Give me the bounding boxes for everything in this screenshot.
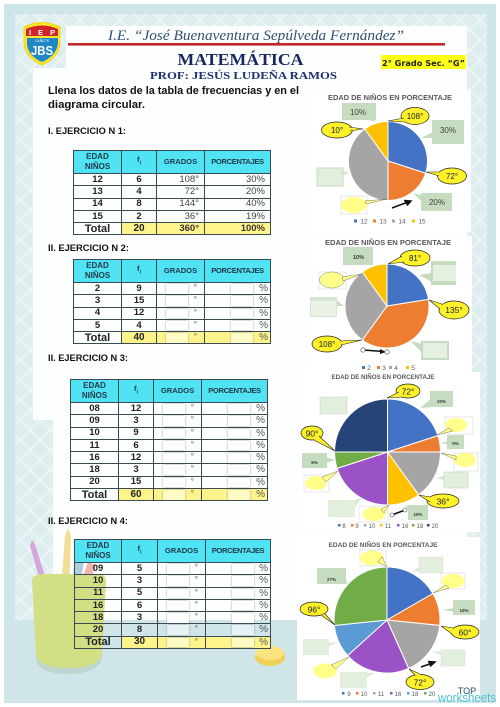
table 2: Total bbox=[85, 332, 110, 344]
table 2: % bbox=[259, 308, 268, 319]
table 3: 09 bbox=[89, 415, 100, 426]
table 2: ° bbox=[194, 308, 197, 317]
table 3: 20 bbox=[89, 476, 100, 487]
label 10% bbox=[343, 247, 373, 265]
label 5% bbox=[302, 453, 335, 468]
label 10% bbox=[442, 600, 475, 615]
legend: 12 bbox=[360, 218, 368, 226]
blank label bbox=[436, 472, 468, 488]
table 3: Total bbox=[82, 489, 107, 501]
callout 81° bbox=[388, 250, 430, 266]
table 3: 6 bbox=[133, 440, 139, 451]
label 10%: 10% bbox=[353, 255, 364, 261]
table 1: 360° bbox=[179, 223, 199, 234]
label 27%: 27% bbox=[327, 577, 336, 582]
table 3: GRADOS bbox=[161, 386, 194, 395]
legend: 5 bbox=[411, 365, 415, 372]
table 2: 4 bbox=[136, 320, 142, 331]
callout 81°: 81° bbox=[409, 254, 421, 263]
callout 108°: 108° bbox=[407, 112, 423, 121]
blank label bbox=[432, 650, 465, 666]
table 4: NIÑOS bbox=[85, 551, 111, 560]
label 10%: 10% bbox=[413, 512, 423, 517]
callout 96° bbox=[300, 602, 335, 625]
table 4: 6 bbox=[137, 600, 142, 611]
table 1: 4 bbox=[136, 186, 142, 197]
callout 108° bbox=[388, 108, 429, 124]
callout 72°: 72° bbox=[414, 678, 426, 688]
table 2: fi bbox=[137, 264, 141, 276]
label 20%: 20% bbox=[429, 198, 445, 207]
table 3: ° bbox=[191, 415, 194, 424]
table 3: % bbox=[256, 452, 265, 463]
table 1: Total bbox=[85, 223, 110, 235]
table 1: 19% bbox=[246, 211, 265, 222]
callout 72°: 72° bbox=[446, 172, 458, 181]
blank callout bbox=[359, 505, 389, 522]
table 3: 12 bbox=[131, 403, 141, 414]
table 3: NIÑOS bbox=[82, 391, 107, 400]
legend: 13 bbox=[379, 218, 387, 226]
callout 90°: 90° bbox=[306, 428, 318, 438]
table 1: fi bbox=[137, 155, 141, 166]
table 4: 5 bbox=[137, 563, 142, 574]
exercise headings: II. EJERCICIO N 2: bbox=[48, 243, 129, 253]
chart 3: EDAD DE NIÑOS EN PORCENTAJE bbox=[332, 374, 434, 381]
label 10%: 10% bbox=[350, 108, 366, 117]
table 4: 18 bbox=[93, 612, 103, 623]
label 20% bbox=[413, 193, 452, 211]
blank callout bbox=[313, 657, 349, 679]
table 3: 15 bbox=[131, 476, 141, 487]
table 3: 08 bbox=[89, 403, 100, 414]
table 2: 3 bbox=[95, 295, 100, 306]
legend: 3 bbox=[382, 365, 386, 372]
table 3: % bbox=[256, 440, 265, 451]
table 1: 20 bbox=[133, 223, 145, 234]
table 2: ° bbox=[194, 295, 197, 304]
callout 10° bbox=[322, 122, 363, 138]
watermark: TOP bbox=[458, 686, 476, 696]
chart 4 bbox=[297, 537, 480, 700]
callout 72° bbox=[406, 669, 434, 690]
table 2: % bbox=[259, 295, 268, 306]
table 4: ° bbox=[195, 588, 198, 597]
table 3: ° bbox=[191, 489, 194, 498]
table 3: % bbox=[256, 403, 265, 414]
table 4: 3 bbox=[137, 612, 142, 623]
table 4: % bbox=[259, 588, 268, 599]
table 1: 20% bbox=[246, 186, 265, 197]
table 4: 09 bbox=[93, 563, 103, 574]
table 2: % bbox=[259, 332, 268, 343]
blank callout bbox=[441, 453, 478, 471]
legend bbox=[354, 218, 426, 226]
table 4: % bbox=[259, 637, 268, 648]
red rule bbox=[68, 43, 445, 46]
arrow bbox=[361, 348, 389, 354]
table 3: 12 bbox=[131, 452, 141, 463]
legend: 18 bbox=[417, 524, 424, 530]
table 2: ° bbox=[194, 332, 197, 341]
table 1: 6 bbox=[136, 174, 142, 185]
legend: 20 bbox=[432, 524, 439, 530]
blank label bbox=[413, 557, 443, 573]
logo shield: CAÑETE bbox=[35, 38, 50, 43]
table 1: 108° bbox=[179, 174, 199, 185]
table 1: 36° bbox=[185, 211, 199, 222]
table 4: % bbox=[259, 612, 268, 623]
table 3: ° bbox=[191, 452, 194, 461]
table 2 bbox=[73, 259, 271, 344]
label 10% bbox=[342, 103, 376, 122]
table 1: 100% bbox=[241, 223, 265, 234]
watermark: worksheets bbox=[437, 691, 496, 705]
table 4: ° bbox=[195, 563, 198, 572]
watermark bbox=[437, 686, 496, 705]
table 1: 72° bbox=[185, 186, 199, 197]
table 4: 3 bbox=[137, 575, 142, 586]
blank label left bbox=[310, 297, 344, 317]
blank label bbox=[320, 397, 347, 414]
table 1: 15 bbox=[92, 211, 103, 222]
table 3: PORCENTAJES bbox=[208, 386, 261, 395]
table 3: 3 bbox=[133, 415, 139, 426]
legend bbox=[338, 524, 439, 530]
main title: MATEMÁTICA bbox=[178, 50, 304, 69]
table 4: ° bbox=[195, 575, 198, 584]
exercise headings: II. EJERCICIO N 3: bbox=[48, 353, 128, 363]
table 3: ° bbox=[191, 403, 194, 412]
table 4: 30 bbox=[134, 636, 145, 647]
arrow bbox=[390, 508, 407, 517]
label 30% bbox=[421, 120, 464, 144]
table 3: ° bbox=[191, 440, 194, 449]
legend: 14 bbox=[398, 218, 406, 226]
table 4: ° bbox=[195, 612, 198, 621]
legend: 9 bbox=[355, 524, 359, 530]
exercise headings: II. EJERCICIO N 4: bbox=[48, 516, 128, 526]
table 3: EDAD bbox=[83, 380, 106, 390]
chart 2: EDAD DE NIÑOS EN PORCENTAJE bbox=[325, 238, 451, 247]
blank callout bbox=[433, 573, 465, 593]
table 1: GRADOS bbox=[164, 157, 197, 166]
table 2: 2 bbox=[95, 283, 100, 294]
table 1: NIÑOS bbox=[85, 162, 110, 171]
table 3: 60 bbox=[130, 489, 142, 500]
table 1: 13 bbox=[92, 186, 103, 197]
table 2: % bbox=[259, 320, 268, 331]
blank callout bbox=[437, 417, 473, 435]
chart 4: EDAD DE NIÑOS EN PORCENTAJE bbox=[328, 540, 438, 549]
chart 1 bbox=[306, 91, 471, 232]
table 4: 11 bbox=[93, 587, 103, 598]
legend: 10 bbox=[369, 524, 376, 530]
legend: 9 bbox=[347, 692, 351, 698]
table 1: 144° bbox=[179, 198, 199, 209]
table 3: 11 bbox=[89, 440, 100, 451]
legend: 8 bbox=[342, 524, 346, 530]
table 4: ° bbox=[195, 637, 198, 646]
table 4: Total bbox=[85, 636, 111, 648]
table 3: ° bbox=[191, 477, 194, 486]
table 4: ° bbox=[195, 624, 198, 633]
callout 10°: 10° bbox=[331, 126, 343, 135]
table 4: 8 bbox=[137, 624, 142, 635]
legend: 11 bbox=[385, 524, 392, 530]
arrow bbox=[421, 662, 435, 667]
table 1: PORCENTAJES bbox=[211, 157, 264, 166]
table 2: PORCENTAJES bbox=[211, 266, 264, 275]
table 3: ° bbox=[191, 464, 194, 473]
label 5%: 5% bbox=[311, 460, 318, 465]
table 1: 8 bbox=[136, 198, 142, 209]
callout 36° bbox=[419, 494, 459, 508]
callout 72° bbox=[387, 384, 420, 398]
table 3: 18 bbox=[89, 464, 100, 475]
table 4: % bbox=[259, 575, 268, 586]
table 1: 40% bbox=[246, 198, 265, 209]
logo shield bbox=[24, 22, 60, 65]
table 4: 10 bbox=[93, 575, 103, 586]
callout 108° bbox=[312, 336, 362, 352]
table 3: 3 bbox=[133, 464, 139, 475]
chart 3 bbox=[299, 372, 480, 532]
legend bbox=[362, 365, 415, 372]
chart 2 bbox=[306, 236, 472, 372]
table 1: 12 bbox=[92, 174, 103, 185]
table 4 bbox=[74, 539, 271, 649]
legend: 16 bbox=[395, 692, 402, 698]
table 4: 16 bbox=[93, 600, 103, 611]
exercise headings: I. EJERCICIO N 1: bbox=[48, 126, 126, 136]
table 3: % bbox=[256, 477, 265, 488]
callout 135° bbox=[429, 300, 469, 319]
table 1: 30% bbox=[246, 174, 265, 185]
instructions: Llena los datos de la tabla de frecuencias y en el bbox=[48, 85, 299, 97]
legend: 4 bbox=[394, 365, 398, 372]
callout 60°: 60° bbox=[459, 628, 471, 638]
table 4: % bbox=[259, 624, 268, 635]
callout 108°: 108° bbox=[319, 340, 335, 349]
label 10%: 10% bbox=[459, 608, 469, 613]
blank callout bbox=[304, 471, 338, 492]
chart 1: EDAD DE NIÑOS EN PORCENTAJE bbox=[328, 93, 452, 102]
callout 36°: 36° bbox=[437, 496, 449, 506]
blank label bbox=[328, 497, 362, 517]
callout 60° bbox=[441, 625, 479, 639]
table 3: 9 bbox=[133, 427, 139, 438]
table 1: 14 bbox=[92, 198, 103, 209]
table 2: ° bbox=[194, 283, 197, 292]
label 20%: 20% bbox=[437, 399, 446, 404]
legend: 16 bbox=[402, 524, 409, 530]
table 2: 4 bbox=[95, 307, 100, 318]
table 2: NIÑOS bbox=[85, 271, 110, 280]
blank label bbox=[317, 168, 350, 186]
legend: 15 bbox=[418, 218, 426, 226]
teacher name: PROF: JESÚS LUDEÑA RAMOS bbox=[150, 70, 337, 82]
table 1: EDAD bbox=[86, 152, 109, 160]
legend: 2 bbox=[367, 365, 371, 372]
table 3: % bbox=[256, 428, 265, 439]
label 27% bbox=[317, 568, 347, 585]
table 4: PORCENTAJES bbox=[212, 546, 264, 555]
school name: I.E. “José Buenaventura Sepúlveda Fernández” bbox=[107, 28, 404, 44]
logo shield: IEP bbox=[29, 28, 55, 37]
table 4: ° bbox=[195, 600, 198, 609]
table 3: % bbox=[256, 464, 265, 475]
label 10% bbox=[405, 505, 428, 520]
blank label bottom bbox=[410, 341, 449, 360]
grade tag: 2° Grado Sec. “G” bbox=[382, 59, 465, 68]
label 5% bbox=[441, 435, 464, 449]
callout 72° bbox=[426, 168, 466, 184]
table 3: fi bbox=[134, 384, 138, 396]
callout 96°: 96° bbox=[308, 604, 320, 614]
table 1 bbox=[73, 150, 271, 235]
instructions bbox=[48, 85, 299, 111]
table 2: 5 bbox=[95, 320, 100, 331]
legend: 11 bbox=[378, 692, 385, 698]
blank callout bbox=[319, 272, 362, 289]
table 2: 15 bbox=[134, 295, 144, 306]
table 1: 2 bbox=[136, 211, 142, 222]
exercise headings bbox=[48, 126, 129, 526]
legend: 10 bbox=[361, 692, 368, 698]
blank label top right bbox=[419, 261, 456, 285]
table 4: GRADOS bbox=[165, 546, 198, 555]
table 2: 9 bbox=[136, 283, 142, 294]
table 4: 5 bbox=[137, 587, 142, 598]
legend: 18 bbox=[412, 692, 419, 698]
table 3: 10 bbox=[89, 427, 100, 438]
label 5%: 5% bbox=[452, 441, 459, 446]
table 3 bbox=[70, 379, 268, 501]
label 20% bbox=[420, 391, 453, 408]
arrow bbox=[392, 200, 411, 208]
table 4: % bbox=[259, 563, 268, 574]
callout 135°: 135° bbox=[445, 305, 463, 315]
blank label bbox=[303, 639, 338, 655]
table 3: ° bbox=[191, 428, 194, 437]
legend bbox=[342, 692, 436, 698]
table 4: fi bbox=[138, 544, 141, 556]
callout 72°: 72° bbox=[402, 386, 414, 396]
table 2: ° bbox=[194, 320, 197, 329]
blank callout bbox=[360, 550, 387, 567]
blank label bbox=[340, 672, 375, 688]
table 3: % bbox=[256, 489, 265, 500]
table 2: 12 bbox=[134, 307, 144, 318]
table 2: 40 bbox=[133, 332, 145, 343]
table 3: 16 bbox=[89, 452, 100, 463]
table 2: GRADOS bbox=[164, 266, 197, 275]
table 2: EDAD bbox=[86, 260, 109, 270]
callout 90° bbox=[301, 426, 335, 451]
instructions: diagrama circular. bbox=[48, 99, 145, 111]
label 30%: 30% bbox=[440, 126, 456, 135]
table 4: % bbox=[259, 600, 268, 611]
table 3: % bbox=[256, 415, 265, 426]
grade tag bbox=[381, 55, 466, 69]
table 4: EDAD bbox=[87, 540, 109, 550]
blank callout bbox=[341, 196, 387, 214]
table 4: 20 bbox=[93, 624, 103, 635]
legend: 20 bbox=[429, 692, 436, 698]
logo shield: JBS bbox=[31, 43, 53, 58]
table 2: % bbox=[259, 283, 268, 294]
